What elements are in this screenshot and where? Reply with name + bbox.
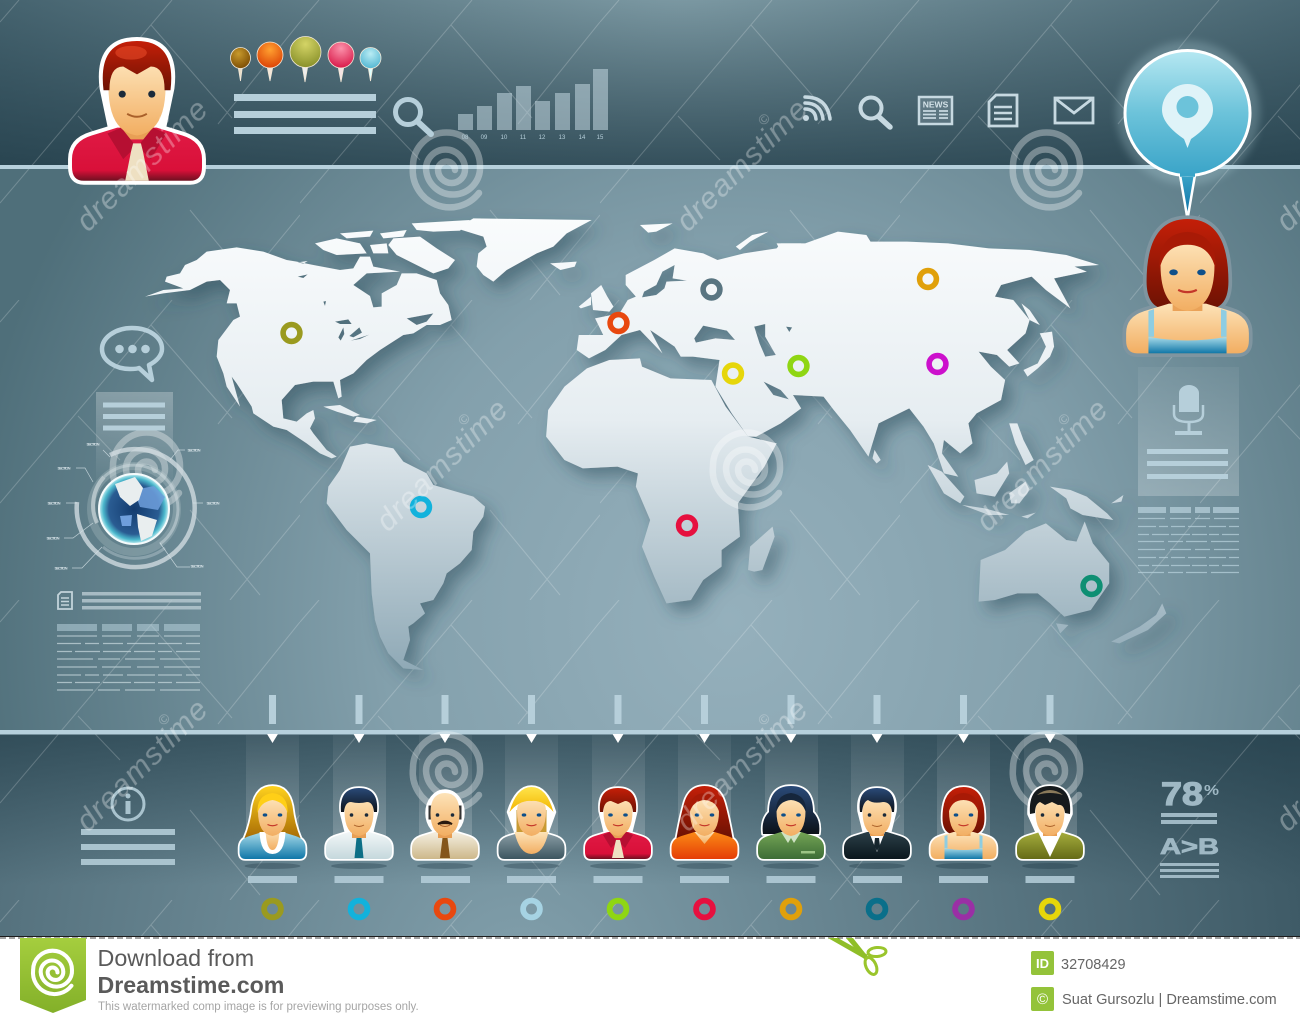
watermark text: © [754,109,774,128]
pin: pink [328,42,354,82]
map location markers [283,271,1100,594]
avatar 8: man in dark suit [844,788,910,859]
globe continents [134,486,165,510]
watermark text: © [154,109,174,128]
icon: scissors [828,938,886,976]
stat: 78 percent: % [1204,782,1219,799]
watermark text: dreamstime [668,692,815,838]
bar chart: 12 [539,135,546,141]
bar chart: 08 [462,135,469,141]
bar chart: 09 [481,135,488,141]
pins [230,36,381,82]
world map [145,218,1166,670]
section labels: SECTION [46,536,60,540]
table: right column [1138,507,1239,572]
section labels: SECTION [54,566,68,570]
bar chart: 15 [597,135,604,141]
bar chart: 10 [501,135,508,141]
right avatar: woman with red hair [1126,219,1249,353]
watermark text: dreamstime [368,392,515,538]
people row connectors [246,695,1077,883]
bar chart: 13 [559,135,566,141]
top-left avatar: man in red shirt [72,41,202,181]
table: left column [57,624,200,690]
section labels: SECTION [86,442,100,446]
icon: envelope [1055,98,1093,123]
avatar 7: woman dark curly hair green shirt [758,786,824,859]
footer: 32708429 [1061,957,1126,973]
location balloon [1116,41,1260,219]
icon: rss [803,97,830,121]
panel: microphone [1138,367,1239,496]
stat: 78 percent: 78 [1161,776,1203,812]
panel: left text card [96,392,173,482]
watermark text: © [454,409,474,428]
watermark text: dreamstime [68,692,215,838]
icon: info [112,788,144,820]
avatar 2: man dark hair white shirt [326,788,392,859]
globe diagram [46,442,220,570]
stat: 78 percent [1160,776,1219,878]
footer: This watermarked comp image is for previewing purposes only. [98,1001,419,1013]
avatar 3: bald man with moustache [412,791,478,859]
section labels: SECTION [190,564,204,568]
text lines: left doc [82,592,201,610]
section labels: SECTION [58,466,71,470]
icon: document [989,95,1017,126]
icon: search [860,98,890,127]
icon: speech bubble [102,328,162,380]
ribbon badge [20,938,86,1013]
stat: 78 percent: A>B [1160,834,1219,859]
status rings [264,901,1058,917]
section labels: SECTION [48,500,61,506]
watermark text: © [1054,409,1074,428]
pin: orange [257,42,283,81]
avatar 6: woman long red hair [672,786,738,859]
id badge [1031,951,1054,975]
avatar 4: woman yellow hair [498,787,564,859]
avatar 9: woman red bob blue top [930,787,996,859]
copyright badge [1031,987,1054,1011]
bar chart: 14 [579,135,586,141]
icon: map pin [1162,84,1213,148]
avatar 1: blonde woman [240,786,306,859]
watermark text: dreamstime [968,392,1115,538]
info block [81,788,175,865]
pin: bronze [230,48,250,81]
id badge: ID [1036,956,1049,971]
icon: news [919,97,952,124]
footer [0,936,1300,1026]
watermark text [63,87,1300,838]
watermark text: © [754,709,774,728]
download heading: Download from [98,945,254,971]
section labels: SECTION [206,500,220,506]
copyright badge: © [1037,991,1048,1008]
watermark text: © [154,709,174,728]
footer: Suat Gursozlu | Dreamstime.com [1062,992,1277,1008]
text lines below pins [234,94,376,134]
section labels [46,442,220,570]
footer: Dreamstime.com [98,972,284,998]
watermark text: dreamstime [68,92,215,238]
text lines [1147,449,1228,479]
section labels: SECTION [188,448,201,452]
icon: microphone [1174,385,1203,435]
pin: olive [290,36,321,82]
icon: document small [58,592,72,609]
icon: news: NEWS [923,100,949,110]
avatar shadows [244,863,1078,869]
watermark text: dreamstime [668,92,815,238]
bar chart: 11 [520,135,527,141]
continents: Europe, Asia, Africa, Oceania [546,223,1166,643]
avatar 5: man red shirt [585,788,651,859]
avatar 10: man with spiky hair olive sweater [1017,786,1083,859]
bar chart [458,69,608,141]
continent: Americas and Greenland [145,218,592,670]
watermark spirals [113,132,1080,809]
pin: cyan [360,48,381,81]
icon: magnifier [396,100,431,134]
